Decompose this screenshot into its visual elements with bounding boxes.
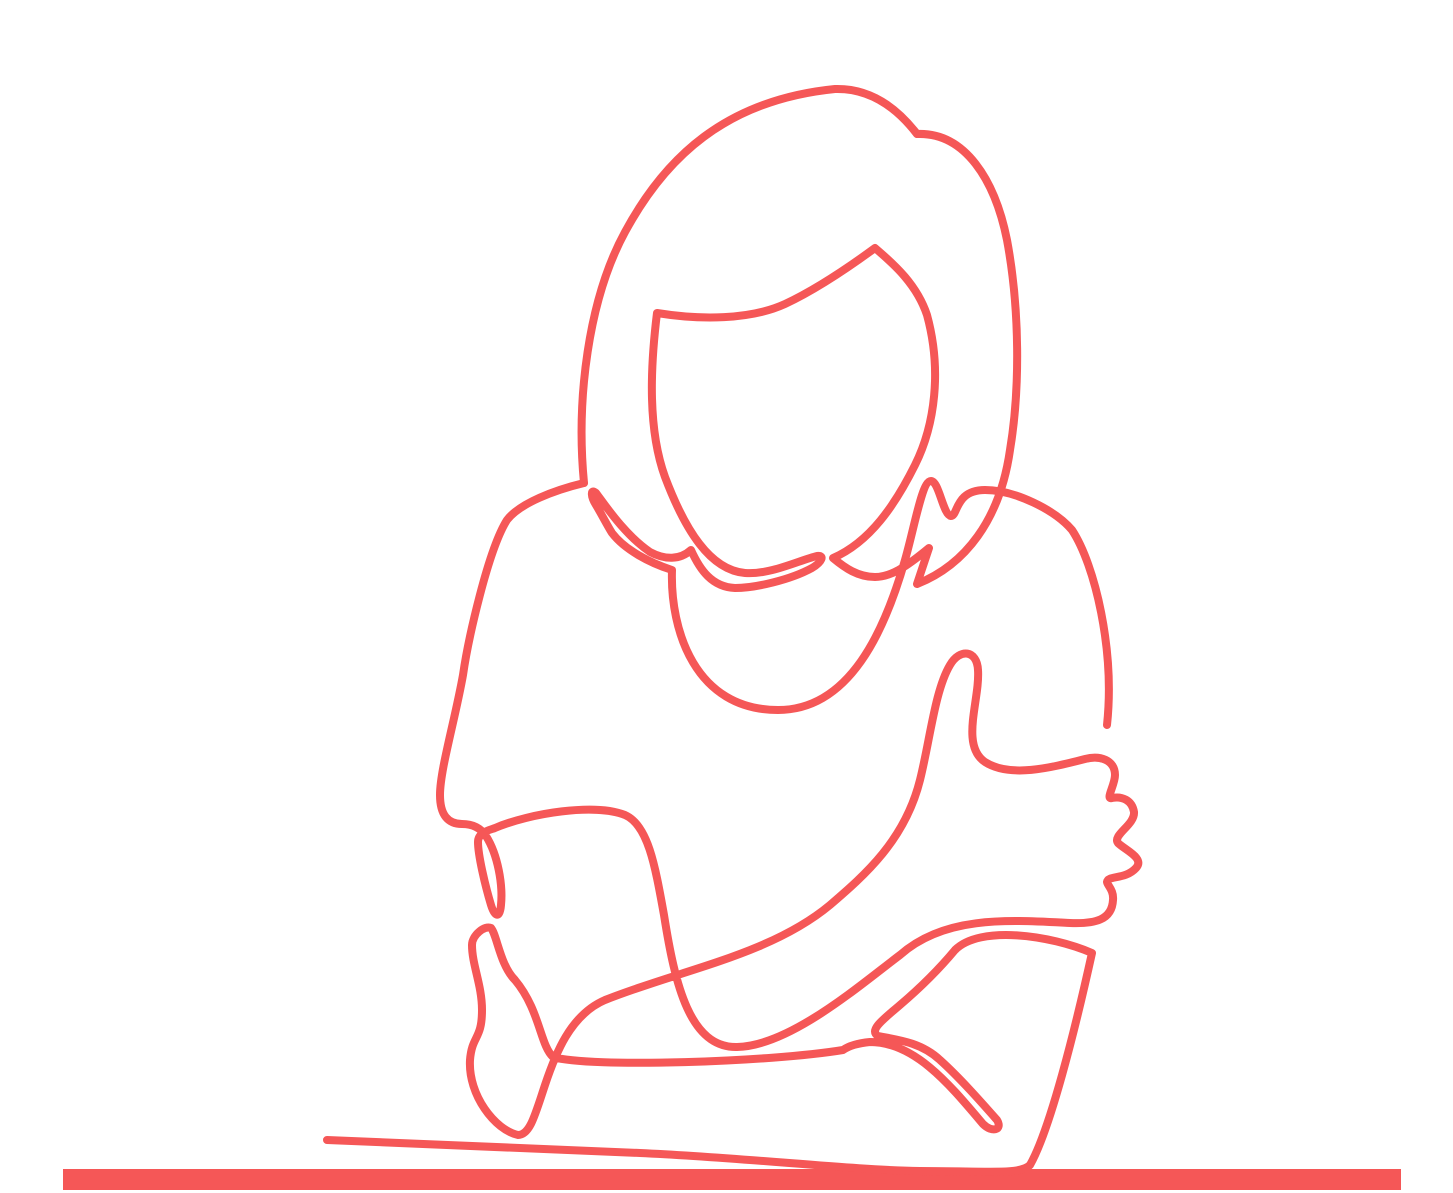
base bar — [63, 1169, 1401, 1190]
shoulder, crossed arms, hands and table line — [327, 483, 1138, 1172]
hair, face, collar and neckline line — [582, 89, 1109, 725]
